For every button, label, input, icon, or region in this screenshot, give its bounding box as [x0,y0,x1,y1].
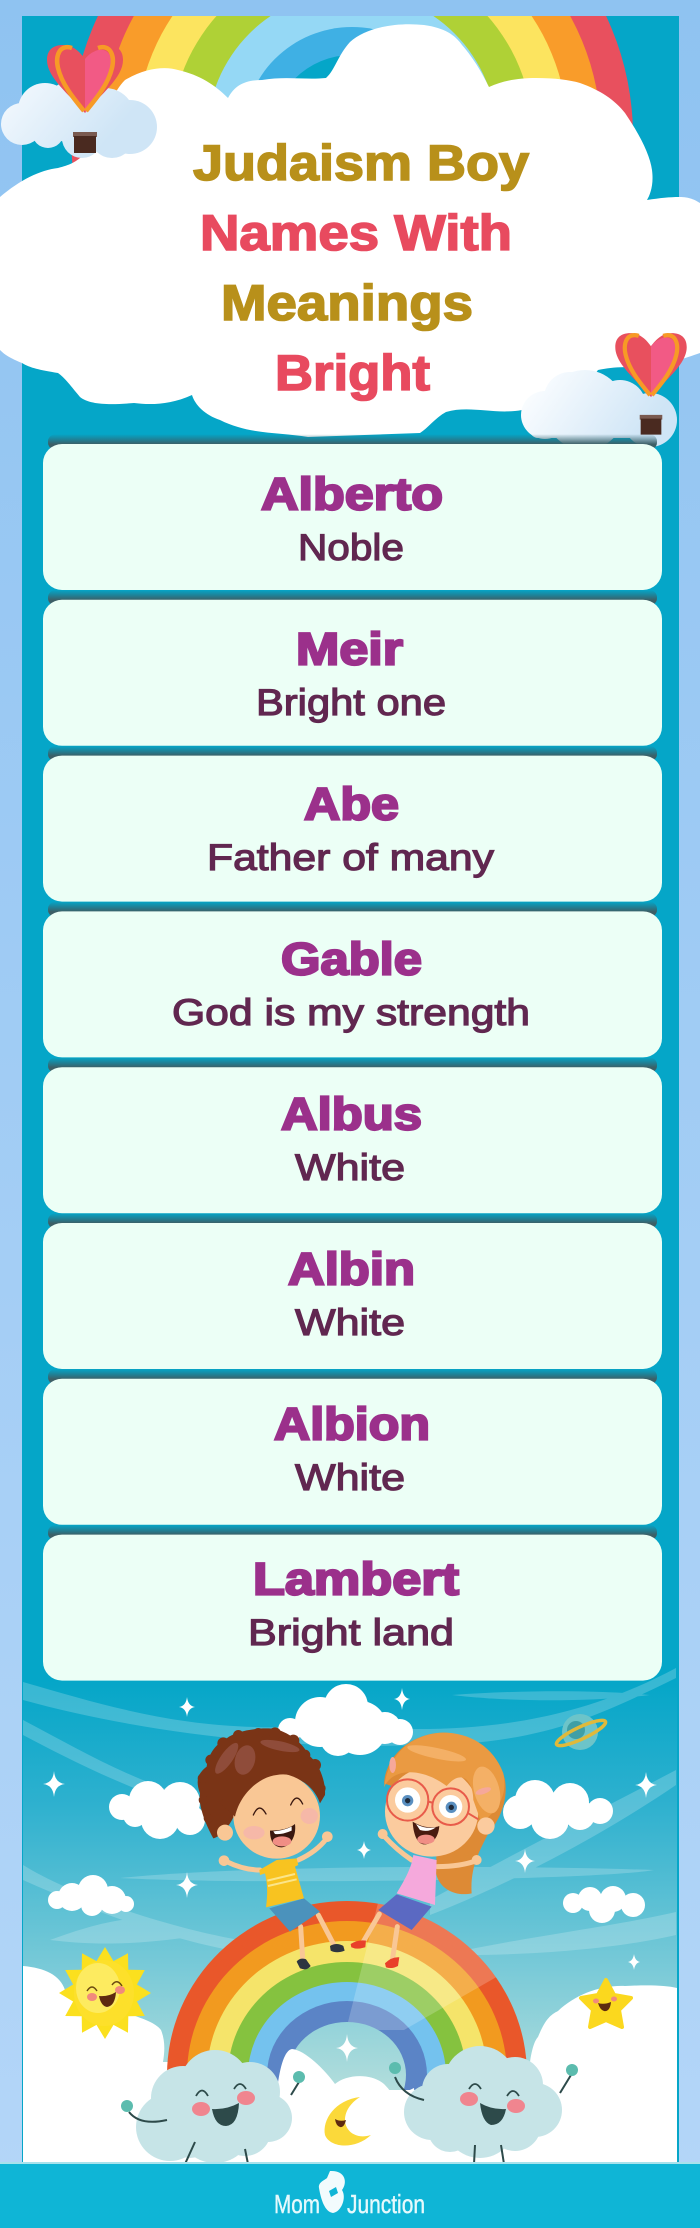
card: Alberto: Alberto [261,469,443,520]
hot air balloon right [615,333,687,435]
sky cloud right [503,1780,613,1839]
card: Gable [43,902,662,1057]
footer bar [0,2162,700,2228]
card: Albin: White [295,1302,405,1343]
header rainbow [72,16,633,164]
title: Bright [275,345,430,401]
star character [581,1980,631,2027]
logo: Mom [274,2189,320,2219]
illustration sky [23,1681,677,2166]
hot air balloon left [47,45,123,153]
small cloud left [1,80,157,158]
card: Meir: Bright one [256,682,446,723]
planet [554,1714,608,1750]
sky cloud top [278,1684,413,1756]
title [193,135,529,401]
card: Albion [43,1369,662,1525]
girl [351,1733,506,1968]
card: Abe: Abe [304,779,399,830]
sky streaks [23,1668,676,1955]
cloud character left [121,2050,305,2164]
sun character [59,1947,151,2039]
card: Lambert: Bright land [248,1612,454,1653]
card: Gable: Gable [281,934,422,985]
boy [198,1727,345,1969]
card: Abe [43,746,662,902]
middle white mound [277,2049,420,2164]
moon character [325,2097,371,2146]
logo: Junction [347,2189,425,2219]
title: Judaism Boy [193,135,529,191]
logo [274,2171,425,2219]
card: Albus: White [295,1147,405,1188]
card: Abe: Father of many [207,837,495,878]
card: Gable: God is my strength [172,992,530,1033]
card: Albin: Albin [288,1244,415,1295]
big title cloud [0,24,700,437]
card: Alberto [43,434,662,590]
card: Albus [43,1058,662,1213]
cloud character right [389,2046,578,2164]
big rainbow [167,1901,526,2090]
card: Albin [43,1214,662,1369]
card: Lambert: Lambert [253,1554,459,1605]
card: Albion: White [295,1457,405,1498]
card: Albus: Albus [281,1089,422,1140]
card: Albion: Albion [274,1399,430,1450]
title: Meanings [221,275,473,331]
title: Names With [200,205,512,261]
white cloud ground [23,1966,677,2164]
card: Meir [43,590,662,746]
sky cloud lower right [563,1886,645,1923]
sky cloud lower left [48,1875,134,1916]
sparkle under rainbow [336,2034,358,2062]
card: Meir: Meir [296,624,403,675]
small cloud right [521,370,677,450]
card: Alberto: Noble [298,527,404,568]
card: Lambert [43,1525,662,1681]
sky cloud left [109,1781,205,1839]
sparkles [43,1688,657,1970]
